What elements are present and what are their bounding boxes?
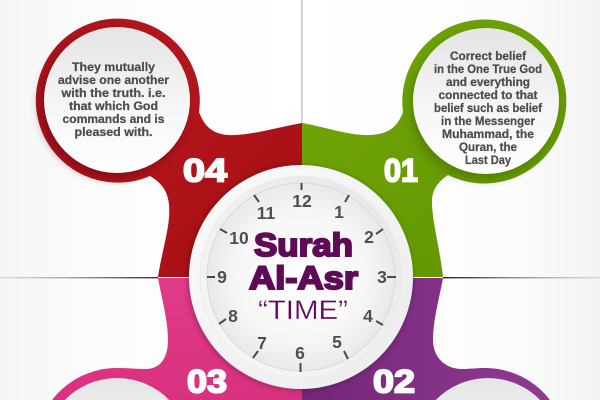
red puzzle shape xyxy=(36,19,302,277)
clock numerals: 11 xyxy=(257,203,276,223)
clock numerals: 7 xyxy=(257,333,267,353)
clock numerals: 12 xyxy=(292,191,312,211)
pink puzzle shape xyxy=(52,278,302,400)
clock xyxy=(189,165,413,389)
title: Surah xyxy=(254,227,353,263)
clock face xyxy=(207,183,395,371)
text: item 01: connected to that xyxy=(438,88,538,102)
text: item 04: advise one another xyxy=(58,73,169,87)
title: Al-Asr xyxy=(249,260,358,296)
panel 02: purple xyxy=(302,278,550,400)
clock numerals: 3 xyxy=(377,267,387,287)
text disc shadow xyxy=(410,33,556,179)
text disc 01 xyxy=(413,28,559,174)
section numbers xyxy=(183,152,418,400)
text: item 01: and everything xyxy=(446,75,530,89)
panel 01: green xyxy=(302,19,566,277)
title xyxy=(249,227,358,325)
purple puzzle shape xyxy=(302,278,550,400)
clock numerals: 5 xyxy=(332,332,342,352)
number 02: 02 xyxy=(373,364,415,400)
text: item 01: Quran, the xyxy=(459,140,517,154)
clock ticks xyxy=(207,183,396,372)
clock rim xyxy=(189,165,413,389)
text disc shadow xyxy=(40,32,186,178)
number 03: 03 xyxy=(187,364,227,400)
text: item 01: Last Day xyxy=(465,153,511,167)
text: item 04: with the truth. i.e. xyxy=(60,86,166,100)
text: item 01: Correct belief xyxy=(450,49,527,63)
clock numerals: 10 xyxy=(229,228,249,248)
green puzzle shape xyxy=(302,19,566,277)
text: item 01: in the One True God xyxy=(434,62,542,76)
panel 03: pink xyxy=(52,278,302,400)
text: item 04: pleased with. xyxy=(74,125,152,139)
title: “TIME” xyxy=(258,295,348,325)
text: item 04: that which God xyxy=(69,99,158,113)
clock numerals: 8 xyxy=(228,306,238,326)
number 01: 01 xyxy=(384,152,418,188)
clock numerals: 9 xyxy=(217,267,227,287)
clock numerals: 4 xyxy=(363,306,373,326)
text: item 01: Muhammad, the xyxy=(442,127,534,141)
text disc 03 xyxy=(65,378,169,400)
number 04: 04 xyxy=(183,152,227,188)
panel 04: red xyxy=(36,19,302,277)
clock numerals: 6 xyxy=(295,343,305,363)
clock numerals: 2 xyxy=(364,227,374,247)
clock numerals: 1 xyxy=(334,202,344,222)
clock shadow xyxy=(187,165,413,391)
text: item 04: commands and is xyxy=(62,112,165,126)
text: item 04 xyxy=(58,60,169,139)
clock numerals xyxy=(217,191,387,363)
clock inner rim xyxy=(200,176,402,378)
text: item 04: They mutually xyxy=(72,60,155,74)
text: item 01: in the Messenger xyxy=(441,114,535,128)
text disc 02 xyxy=(436,378,540,400)
text: item 01 xyxy=(434,49,543,167)
text: item 01: belief such as belief xyxy=(434,101,543,115)
text disc 04 xyxy=(44,27,190,173)
